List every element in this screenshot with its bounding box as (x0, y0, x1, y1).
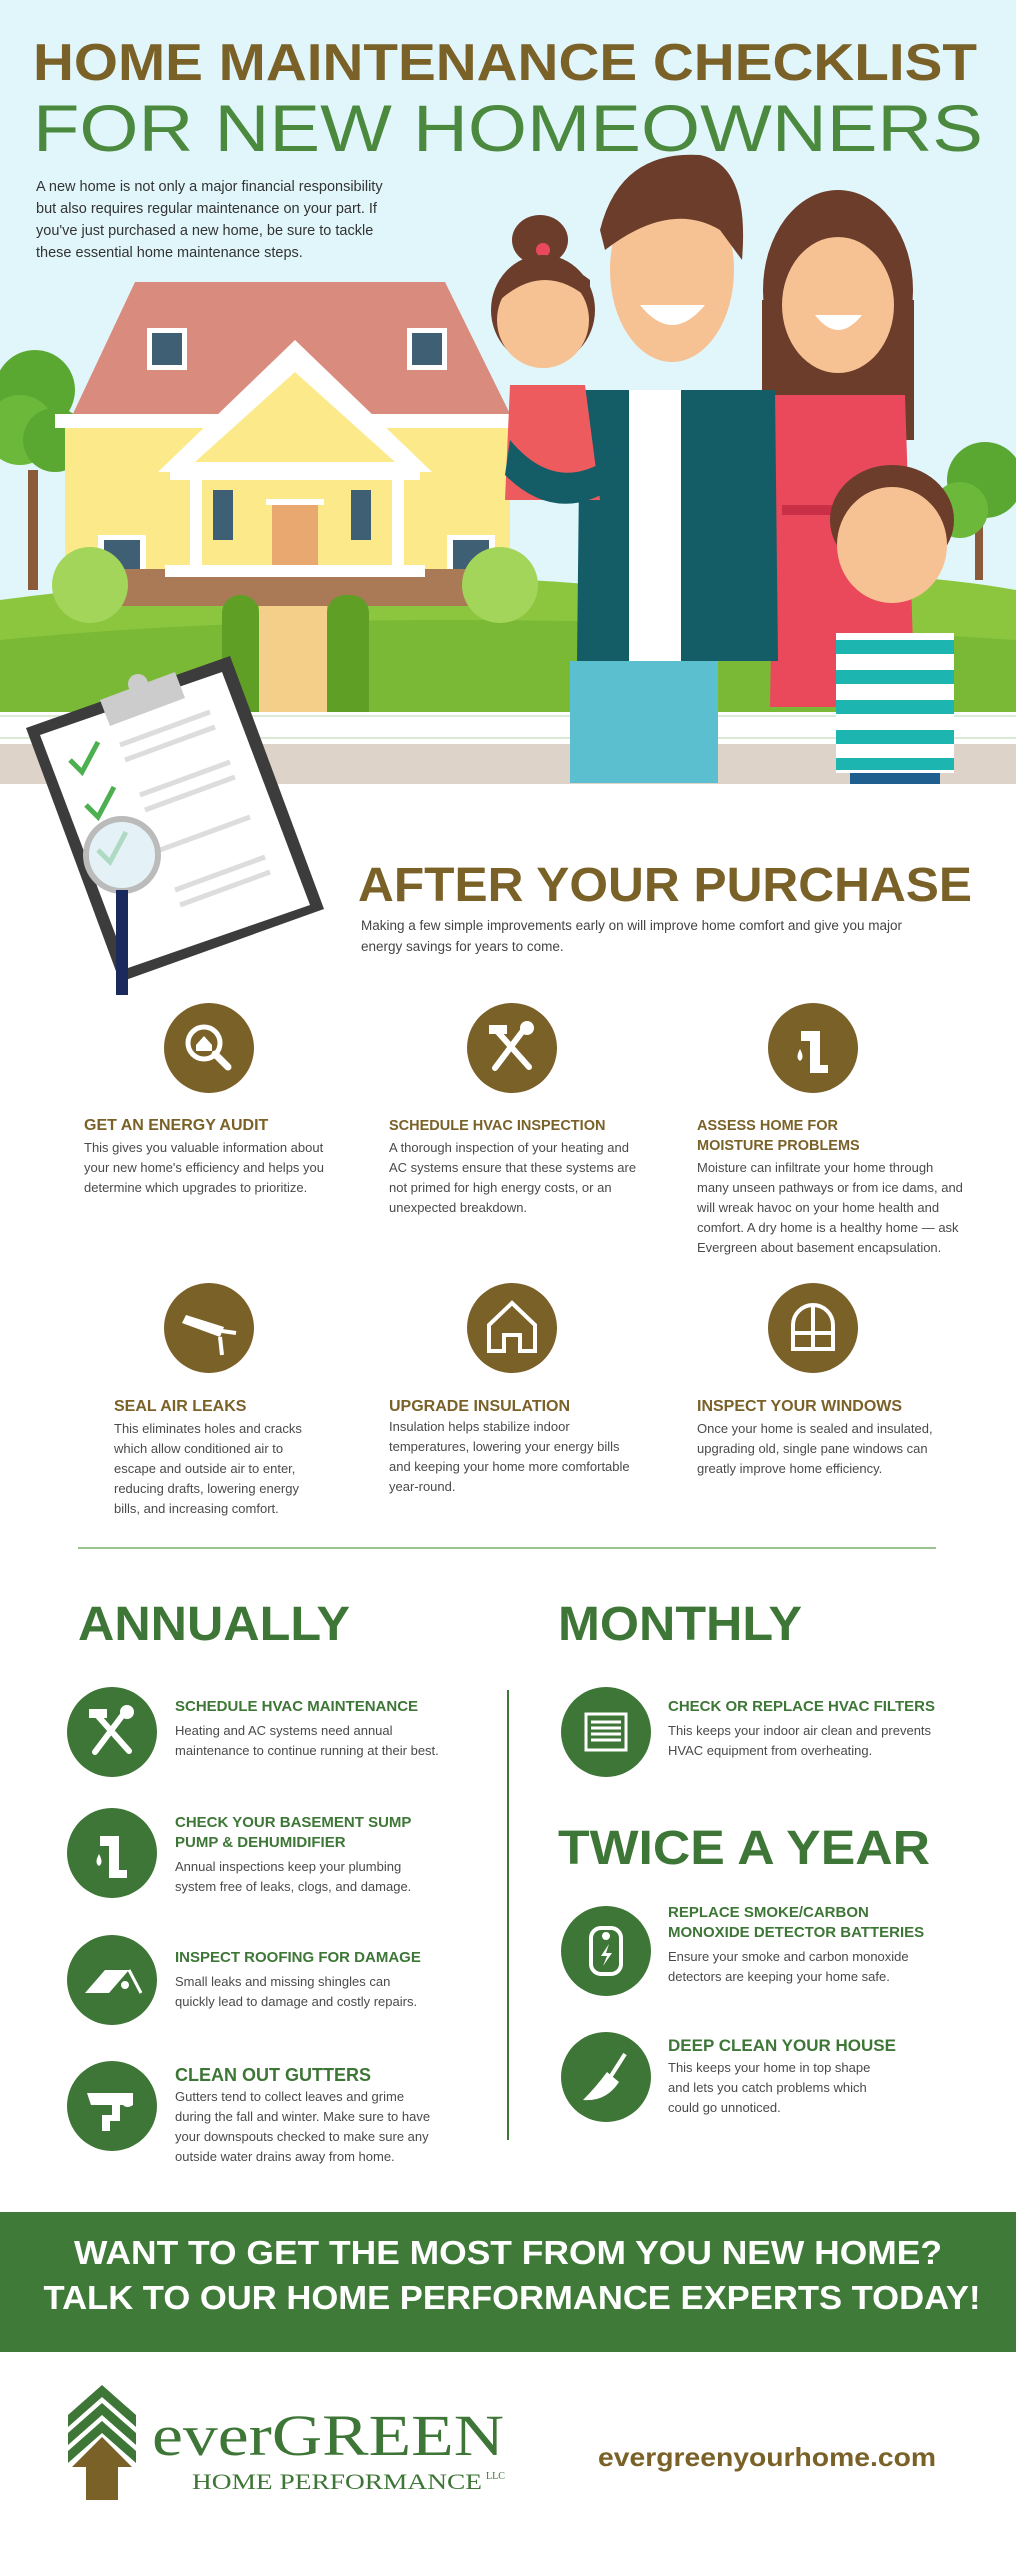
text: seal air leaks: escape and outside air to enter, (114, 1461, 295, 1476)
text: hvac inspection (389, 1118, 636, 1215)
item: sump pump: system free of leaks, clogs, and damage. (175, 1879, 411, 1894)
intro text (36, 179, 383, 261)
text: hvac inspection: unexpected breakdown. (389, 1200, 527, 1215)
text: hvac inspection: AC systems ensure that these systems are (389, 1160, 636, 1175)
banner: call to action (0, 2212, 1016, 2352)
text: inspect windows: greatly improve home efficiency. (697, 1461, 882, 1476)
text: moisture: ASSESS HOME FOR (697, 1118, 838, 1134)
logo: LLC (486, 2471, 505, 2482)
text: outside water drains away from home. (175, 2149, 395, 2164)
banner: call to action: WANT TO GET THE MOST FROM YOU NEW HOME? (74, 2234, 942, 2271)
intro text: you've just purchased a new home, be sure to tackle (36, 223, 373, 239)
subtitle: energy savings for years to come. (361, 939, 564, 954)
header background (0, 0, 1016, 784)
purchase items (84, 1003, 963, 1516)
text: hvac inspection: not primed for high energy costs, or an (389, 1180, 612, 1195)
text: upgrade insulation: and keeping your home more comfortable (389, 1459, 630, 1474)
item: roofing (67, 1935, 421, 2025)
text: moisture: Evergreen about basement encapsulation. (697, 1240, 941, 1255)
twice item: smoke detector: REPLACE SMOKE/CARBON (668, 1904, 869, 1921)
text: seal air leaks: bills, and increasing comfort. (114, 1501, 279, 1516)
text: energy audit (84, 1117, 324, 1195)
text: inspect windows: upgrading old, single pane windows can (697, 1441, 928, 1456)
clipboard illustration (26, 656, 324, 995)
logo (68, 2385, 505, 2500)
text: seal air leaks: which allow conditioned air to (114, 1441, 283, 1456)
item: hvac maintenance: Heating and AC systems need annual (175, 1723, 393, 1738)
item: roofing: Small leaks and missing shingles can (175, 1974, 390, 1989)
twice item: deep clean: This keeps your home in top shape (668, 2060, 870, 2075)
text: inspect windows: Once your home is sealed and insulated, (697, 1421, 933, 1436)
text: upgrade insulation: temperatures, lowering your energy bills (389, 1439, 620, 1454)
item: hvac maintenance (67, 1687, 439, 1777)
twice item: deep clean: DEEP CLEAN YOUR HOUSE (668, 2036, 896, 2055)
item: roofing: quickly lead to damage and costly repairs. (175, 1994, 417, 2009)
twice item: deep clean: and lets you catch problems which (668, 2080, 867, 2095)
intro text: these essential home maintenance steps. (36, 245, 303, 261)
icon: caulk gun (164, 1283, 254, 1373)
icon: hvac tools (467, 1003, 557, 1093)
item: sump pump (67, 1808, 411, 1898)
item: sump pump: Annual inspections keep your plumbing (175, 1859, 401, 1874)
title: HOME MAINTENANCE CHECKLIST (33, 34, 977, 92)
text: moisture: Moisture can infiltrate your home through (697, 1160, 933, 1175)
twice item: deep clean: could go unnoticed. (668, 2100, 781, 2115)
text: moisture: comfort. A dry home is a healthy home — ask (697, 1220, 959, 1235)
text: upgrade insulation: Insulation helps stabilize indoor (389, 1419, 570, 1434)
subtitle (361, 918, 902, 954)
item: hvac maintenance: SCHEDULE HVAC MAINTENANCE (175, 1698, 418, 1715)
text: upgrade insulation: UPGRADE INSULATION (389, 1398, 570, 1415)
icon: house (467, 1283, 557, 1373)
twice item: smoke detector: MONOXIDE DETECTOR BATTERIES (668, 1924, 924, 1941)
monthly item: hvac filters (561, 1687, 935, 1777)
item: gutters: CLEAN OUT GUTTERS (175, 2065, 371, 2085)
item: roofing: INSPECT ROOFING FOR DAMAGE (175, 1949, 421, 1966)
text: inspect windows (697, 1398, 933, 1476)
title: FOR NEW HOMEOWNERS (33, 91, 983, 165)
logo: HOME PERFORMANCE (192, 2469, 482, 2494)
title (33, 34, 983, 165)
monthly item: hvac filters: HVAC equipment from overheating. (668, 1743, 872, 1758)
icon: window (768, 1283, 858, 1373)
text: moisture: MOISTURE PROBLEMS (697, 1138, 860, 1154)
intro text: but also requires regular maintenance on your part. If (36, 201, 377, 217)
monthly item: hvac filters: This keeps your indoor air clean and prevents (668, 1723, 931, 1738)
icon: faucet (768, 1003, 858, 1093)
text: energy audit: determine which upgrades to prioritize. (84, 1180, 307, 1195)
text: seal air leaks: reducing drafts, lowering energy (114, 1481, 299, 1496)
website url: evergreenyourhome.com (598, 2442, 936, 2472)
item: gutters: your downspouts checked to make sure any (175, 2129, 429, 2144)
text: energy audit: GET AN ENERGY AUDIT (84, 1117, 268, 1134)
text: moisture (697, 1118, 963, 1255)
item: gutters: Gutters tend to collect leaves and grime (175, 2089, 404, 2104)
icon: energy audit (164, 1003, 254, 1093)
text: energy audit: This gives you valuable information about (84, 1140, 323, 1155)
logo: everGREEN (152, 2403, 504, 2468)
subtitle: Making a few simple improvements early on will improve home comfort and give you major (361, 918, 902, 933)
illustration: house and family scene (0, 154, 1016, 784)
text: moisture: will wreak havoc on your home health and (697, 1200, 939, 1215)
text: moisture: many unseen pathways or from ice dams, and (697, 1180, 963, 1195)
banner: call to action: TALK TO OUR HOME PERFORMANCE EXPERTS TODAY! (44, 2279, 980, 2316)
text: seal air leaks: SEAL AIR LEAKS (114, 1398, 246, 1415)
text: inspect windows: INSPECT YOUR WINDOWS (697, 1398, 902, 1415)
monthly item: hvac filters: CHECK OR REPLACE HVAC FILTERS (668, 1698, 935, 1715)
text: seal air leaks: This eliminates holes and cracks (114, 1421, 302, 1436)
item: hvac maintenance: maintenance to continue running at their best. (175, 1743, 439, 1758)
text: hvac inspection: A thorough inspection of your heating and (389, 1140, 629, 1155)
item: gutters: during the fall and winter. Make sure to have (175, 2109, 430, 2124)
item: sump pump: PUMP & DEHUMIDIFIER (175, 1834, 346, 1851)
text: upgrade insulation (389, 1398, 630, 1494)
icon: tree (68, 2385, 136, 2500)
twice item: deep clean (561, 2032, 896, 2122)
twice item: smoke detector (561, 1904, 924, 1996)
item: gutters (67, 2061, 430, 2164)
annual list (67, 1687, 439, 2164)
text: upgrade insulation: year-round. (389, 1479, 455, 1494)
text: hvac inspection: SCHEDULE HVAC INSPECTION (389, 1118, 605, 1134)
twice item: smoke detector: Ensure your smoke and carbon monoxide (668, 1949, 909, 1964)
intro text: A new home is not only a major financial responsibility (36, 179, 383, 195)
text: energy audit: your new home's efficiency and helps you (84, 1160, 324, 1175)
item: sump pump: CHECK YOUR BASEMENT SUMP (175, 1814, 411, 1831)
twice item: smoke detector: detectors are keeping your home safe. (668, 1969, 890, 1984)
text: seal air leaks (114, 1398, 302, 1516)
